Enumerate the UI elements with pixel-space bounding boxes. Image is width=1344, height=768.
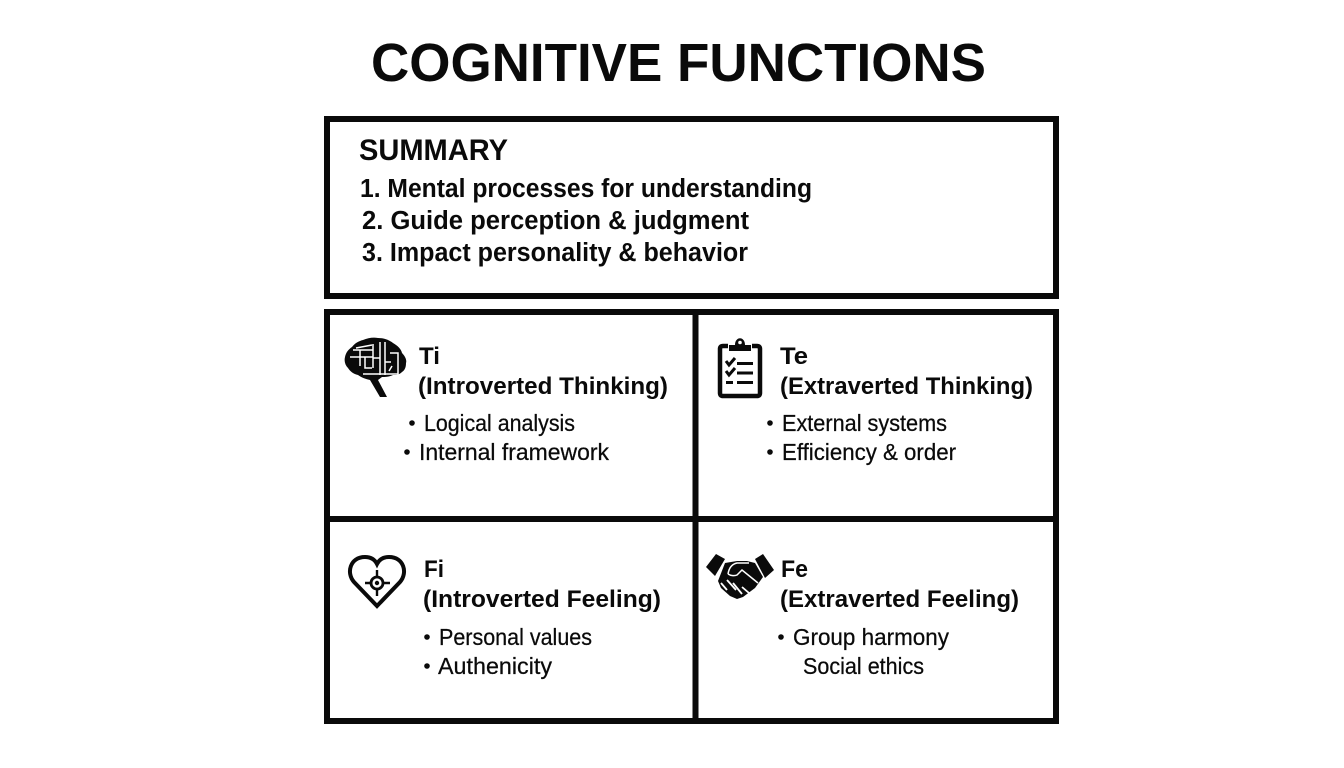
bullet list: Ti: Logical analysis <box>424 410 575 436</box>
heading: Fi: Fi <box>424 556 444 583</box>
icon: heart with target <box>350 557 404 606</box>
summary list <box>360 175 812 267</box>
heading: Fe: Fe <box>781 556 808 583</box>
bullet list: Fe <box>778 624 949 679</box>
summary heading: SUMMARY <box>359 134 508 167</box>
panel: Te <box>720 338 1033 465</box>
subheading: Introverted Thinking: (Introverted Thinking) <box>418 373 668 400</box>
subheading: Extraverted Feeling: (Extraverted Feeling) <box>780 586 1019 613</box>
summary list: 3. Impact personality & behavior <box>362 239 748 267</box>
bullet list: Fi: Personal values <box>439 624 592 650</box>
subheading: Introverted Feeling: (Introverted Feeling) <box>423 586 661 613</box>
panel: Fe <box>706 554 1019 679</box>
bullet list: Te: External systems <box>782 410 947 436</box>
bullet list: Fi: Authenicity <box>438 653 552 679</box>
summary list: 2. Guide perception & judgment <box>362 207 749 235</box>
bullet list: Ti: Internal framework <box>419 439 609 465</box>
summary list: 1. Mental processes for understanding <box>360 175 812 203</box>
bullet list: Te: Efficiency & order <box>782 439 956 465</box>
icon: clipboard checklist <box>720 338 760 396</box>
panel: function grid <box>327 312 1056 721</box>
icon: brain with circuit <box>345 338 406 397</box>
subheading: Extraverted Thinking: (Extraverted Thinking) <box>780 373 1033 400</box>
bullet list: Te <box>767 410 956 465</box>
heading: Ti: Ti <box>419 343 440 370</box>
panel: summary <box>327 119 1056 296</box>
panel: Fi <box>350 556 661 679</box>
icon: handshake <box>706 554 774 599</box>
bullet list: Ti <box>404 410 609 465</box>
bullet list: Fi <box>424 624 592 679</box>
title: COGNITIVE FUNCTIONS <box>371 33 986 93</box>
bullet list: Fe: Social ethics <box>803 653 924 679</box>
heading: Te: Te <box>780 343 808 370</box>
panel: Ti <box>345 338 668 465</box>
bullet list: Fe: Group harmony <box>793 624 949 650</box>
